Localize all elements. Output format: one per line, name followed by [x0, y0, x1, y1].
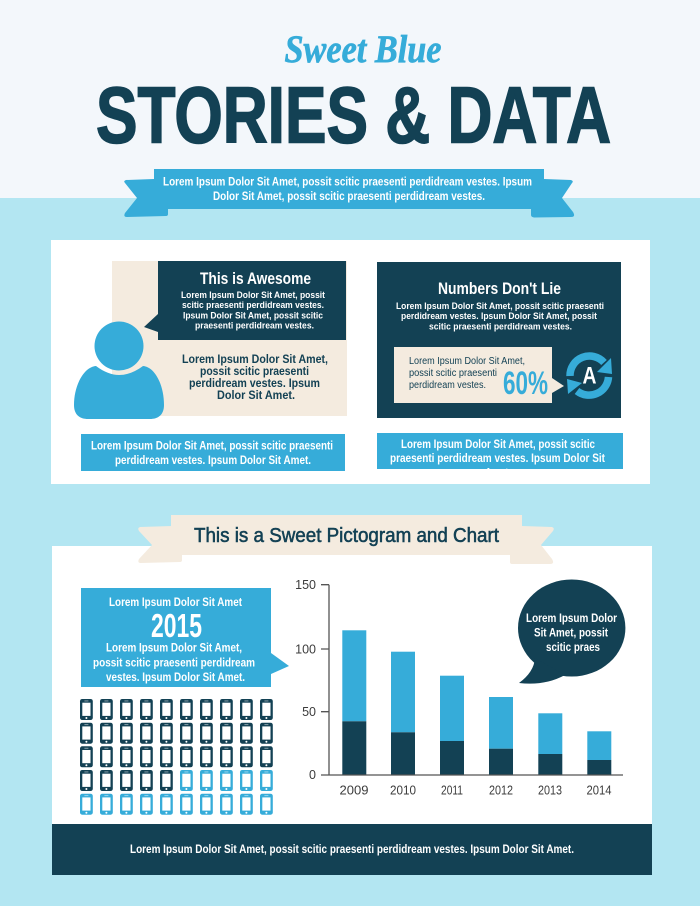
- speech box: This is Awesome: praesenti perdidream vestes.: [195, 320, 314, 330]
- callout: 2015: [81, 588, 289, 687]
- x axis labels: 2011: [441, 784, 463, 798]
- beige text block: perdidream vestes. Ipsum: [189, 378, 320, 390]
- x axis labels: [340, 784, 612, 798]
- x axis labels: 2012: [489, 784, 513, 798]
- y axis labels: 100: [295, 642, 316, 656]
- y axis labels: 150: [295, 578, 316, 592]
- callout: 2015: Lorem Ipsum Dolor Sit Amet: [109, 597, 242, 609]
- beige text block: Dolor Sit Amet.: [217, 390, 295, 402]
- beige story block: [112, 261, 347, 416]
- icon: person: [74, 322, 164, 419]
- callout: 2015: possit scitic praesenti perdidream: [93, 658, 255, 670]
- callout with 60 percent: Lorem Ipsum Dolor Sit Amet,: [409, 356, 525, 367]
- blue caption right, clipped: [377, 433, 623, 469]
- speech box: This is Awesome: scitic praesenti perdidream vestes.: [182, 300, 324, 310]
- footer bar: [52, 824, 652, 875]
- callout with 60 percent: possit scitic praesenti: [409, 368, 497, 379]
- chart axes: [321, 585, 623, 775]
- blue caption right, clipped: Amet.: [485, 468, 511, 480]
- pictogram: phones: [80, 699, 273, 815]
- script heading: Sweet Blue: Sweet Blue: [284, 28, 442, 71]
- blue caption left: [81, 434, 345, 471]
- beige text block: [182, 354, 328, 402]
- beige text block: Lorem Ipsum Dolor Sit Amet,: [182, 354, 328, 366]
- x axis labels: 2014: [586, 784, 612, 798]
- blue caption right, clipped: praesenti perdidream vestes. Ipsum Dolor Sit: [390, 453, 605, 465]
- callout: 2015: 2015: [151, 607, 202, 644]
- callout: 2015: Lorem Ipsum Dolor Sit Amet,: [106, 642, 242, 654]
- callout with 60 percent: 60%: [503, 365, 548, 401]
- blue caption right, clipped: Lorem Ipsum Dolor Sit Amet, possit scitic: [401, 439, 596, 451]
- blue caption left: Lorem Ipsum Dolor Sit Amet, possit scitic praesenti: [91, 440, 333, 452]
- icon: cycle arrows with A: [567, 356, 612, 395]
- y axis labels: 0: [309, 768, 316, 782]
- dark box: Numbers Don't Lie: [377, 262, 621, 418]
- section ribbon heading: [138, 515, 554, 564]
- top ribbon banner: Lorem Ipsum Dolor Sit Amet, possit scitic praesenti perdidream vestes. Ipsum: [163, 176, 532, 188]
- top ribbon banner: Dolor Sit Amet, possit scitic praesenti perdidream vestes.: [213, 191, 485, 203]
- beige text block: possit scitic praesenti: [200, 366, 309, 378]
- x axis labels: 2010: [390, 784, 416, 798]
- dark box: Numbers Don't Lie: Numbers Don't Lie: [438, 280, 561, 298]
- speech box: This is Awesome: This is Awesome: [200, 270, 311, 288]
- callout with 60 percent: [394, 347, 564, 403]
- y axis labels: [295, 578, 316, 782]
- bar chart: [295, 578, 623, 798]
- speech box: This is Awesome: Lorem Ipsum Dolor Sit Amet, possit: [181, 290, 325, 300]
- callout: 2015: vestes. Ipsum Dolor Sit Amet.: [106, 672, 245, 684]
- speech bubble: [518, 580, 625, 684]
- speech box: This is Awesome: Ipsum Dolor Sit Amet, possit scitic: [183, 310, 323, 320]
- dark box: Numbers Don't Lie: scitic praesenti perdidream vestes.: [429, 322, 572, 332]
- section ribbon heading: This is a Sweet Pictogram and Chart: [194, 525, 499, 547]
- speech box: This is Awesome: [144, 261, 346, 340]
- footer bar: Lorem Ipsum Dolor Sit Amet, possit scitic praesenti perdidream vestes. Ipsum Dolor Sit Amet.: [130, 844, 574, 856]
- dark box: Numbers Don't Lie: perdidream vestes. Ipsum Dolor Sit Amet, possit: [401, 311, 597, 321]
- callout with 60 percent: perdidream vestes.: [409, 380, 486, 391]
- speech bubble: Sit Amet, possit: [534, 628, 608, 640]
- blue caption left: perdidream vestes. Ipsum Dolor Sit Amet.: [115, 455, 311, 467]
- speech bubble: scitic praes: [546, 642, 600, 654]
- x axis labels: 2009: [340, 784, 369, 798]
- speech bubble: Lorem Ipsum Dolor: [526, 613, 617, 625]
- panel: stories and numbers: [51, 240, 650, 484]
- bars 2009-2014: [342, 630, 611, 775]
- panel: pictogram and chart: [52, 515, 652, 824]
- icon: cycle arrows with A: A: [582, 362, 596, 390]
- y axis labels: 50: [302, 705, 316, 719]
- dark box: Numbers Don't Lie: Lorem Ipsum Dolor Sit Amet, possit scitic praesenti: [396, 301, 604, 311]
- x axis labels: 2013: [538, 784, 562, 798]
- top ribbon banner: [124, 169, 574, 218]
